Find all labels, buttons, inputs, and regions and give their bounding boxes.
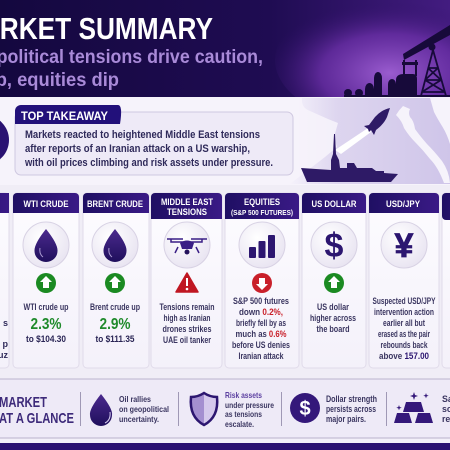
card header: US DOLLAR	[312, 199, 357, 210]
icon: shield	[191, 393, 217, 425]
tensions text: drones strikes	[162, 324, 212, 334]
glance heading: AT A GLANCE	[0, 410, 74, 427]
badge: top takeaway: TOP TAKEAWAY	[21, 111, 108, 123]
icon: drop	[90, 394, 112, 426]
panel: USD/JPY	[369, 193, 439, 368]
icon: oil drop	[23, 222, 69, 268]
badge: top takeaway	[15, 105, 121, 124]
tensions text: high as Iranian	[164, 313, 210, 323]
subtitle	[0, 47, 263, 91]
risk note: under pressure	[225, 400, 274, 410]
oil note	[119, 394, 169, 424]
panel: left partial card: p	[2, 339, 8, 349]
oil note: on geopolitical	[119, 404, 169, 414]
takeaway text: Markets reacted to heightened Middle East tensions	[25, 129, 260, 141]
dollar text: the board	[316, 324, 350, 334]
footer bar	[0, 443, 450, 450]
icon: up arrow	[324, 273, 344, 293]
equities text: S&P 500 futures	[233, 296, 289, 306]
Brent text	[90, 302, 140, 344]
panel: WTI crude	[13, 193, 79, 368]
card header	[225, 193, 299, 219]
icon: yen sign: ¥	[395, 227, 414, 265]
icon: warship	[301, 134, 398, 182]
equities text: before US denies	[232, 340, 290, 350]
Brent text: 2.9%	[100, 316, 130, 333]
icon: warning triangle	[176, 273, 198, 292]
panel: right partial card	[442, 193, 450, 368]
equities text: Iranian attack	[238, 351, 284, 361]
WTI text: 2.3%	[30, 316, 62, 333]
card header	[302, 193, 366, 213]
dollar note: persists across	[326, 404, 376, 414]
WTI text	[24, 302, 69, 344]
USD/JPY text: above 157.00	[379, 351, 429, 361]
Brent text: Brent crude up	[90, 302, 140, 312]
dollar note	[326, 394, 377, 424]
panel: left partial card: s	[3, 318, 8, 328]
glance heading: MARKET	[0, 394, 47, 411]
cards band background	[0, 185, 450, 378]
panel: top takeaway	[0, 105, 293, 175]
icon: dollar sign	[311, 222, 357, 268]
risk note: escalate.	[225, 419, 254, 429]
oil note: uncertainty.	[119, 414, 159, 424]
tensions text: Tensions remain	[160, 302, 214, 312]
risk note: Risk assets	[225, 390, 262, 400]
oil note: Oil rallies	[119, 394, 151, 404]
panel: left partial card	[0, 193, 9, 368]
takeaway text: after reports of an Iranian attack on a US warship,	[25, 143, 250, 155]
takeaway text: with oil prices climbing and risk assets under pressure.	[24, 157, 273, 169]
card header: BRENT CRUDE	[87, 199, 143, 210]
map backdrop	[290, 98, 450, 184]
tensions text: UAE oil tanker	[163, 335, 211, 345]
panel: US dollar	[302, 193, 366, 368]
card header	[151, 193, 222, 219]
risk note: as tensions	[225, 409, 262, 419]
icon: up arrow	[105, 273, 125, 293]
refinery and oil pump silhouette	[344, 25, 450, 98]
panel: market at a glance	[0, 379, 450, 438]
USD/JPY text	[372, 296, 436, 361]
WTI text: to $104.30	[26, 334, 66, 344]
icon: dollar sign: $	[325, 227, 344, 265]
card header	[83, 193, 149, 213]
tensions text	[160, 302, 214, 345]
icon: drone	[164, 222, 210, 268]
icon: dollar coin	[290, 393, 320, 423]
card header	[13, 193, 79, 213]
equities text: briefly fell by as	[236, 318, 286, 328]
glance heading	[0, 394, 74, 427]
equities text	[232, 296, 290, 361]
card header: TENSIONS	[167, 207, 207, 218]
icon: up arrow	[36, 273, 56, 293]
safe haven note	[442, 394, 450, 424]
Brent text: to $111.35	[96, 334, 134, 344]
dollar text	[310, 302, 356, 334]
USD/JPY text: rebounds back	[380, 340, 428, 350]
card header: (S&P 500 FUTURES)	[231, 208, 293, 217]
panel: Middle East tensions	[151, 193, 222, 368]
icon: dollar coin: $	[299, 398, 311, 420]
top takeaway section background	[0, 97, 450, 185]
icon: down arrow	[252, 273, 272, 293]
panel: Brent crude	[83, 193, 149, 368]
WTI text: WTI crude up	[24, 302, 69, 312]
risk note	[225, 390, 274, 429]
icon: oil drop	[92, 222, 138, 268]
panel: Equities	[225, 193, 299, 368]
icon: missile	[364, 108, 390, 135]
USD/JPY text: earlier all but	[383, 318, 425, 328]
equities text: much as 0.6%	[236, 329, 286, 339]
header banner	[0, 0, 450, 97]
card header: USD/JPY	[386, 199, 421, 210]
dollar note: Dollar strength	[326, 394, 377, 404]
equities text: down 0.2%,	[239, 307, 283, 317]
icon: bar chart	[239, 222, 285, 268]
card header	[369, 193, 439, 213]
icon: partial circle emblem	[0, 115, 9, 165]
card header: EQUITIES	[244, 197, 280, 208]
card header: WTI CRUDE	[24, 199, 68, 210]
dollar text: US dollar	[317, 302, 349, 312]
icon: warship and missile	[301, 108, 398, 182]
card header: MIDDLE EAST	[161, 197, 213, 208]
takeaway text	[24, 129, 273, 169]
dollar text: higher across	[310, 313, 356, 323]
dollar note: major pairs.	[326, 414, 366, 424]
icon: gold bars	[394, 392, 433, 423]
icon: yen sign	[381, 222, 427, 268]
